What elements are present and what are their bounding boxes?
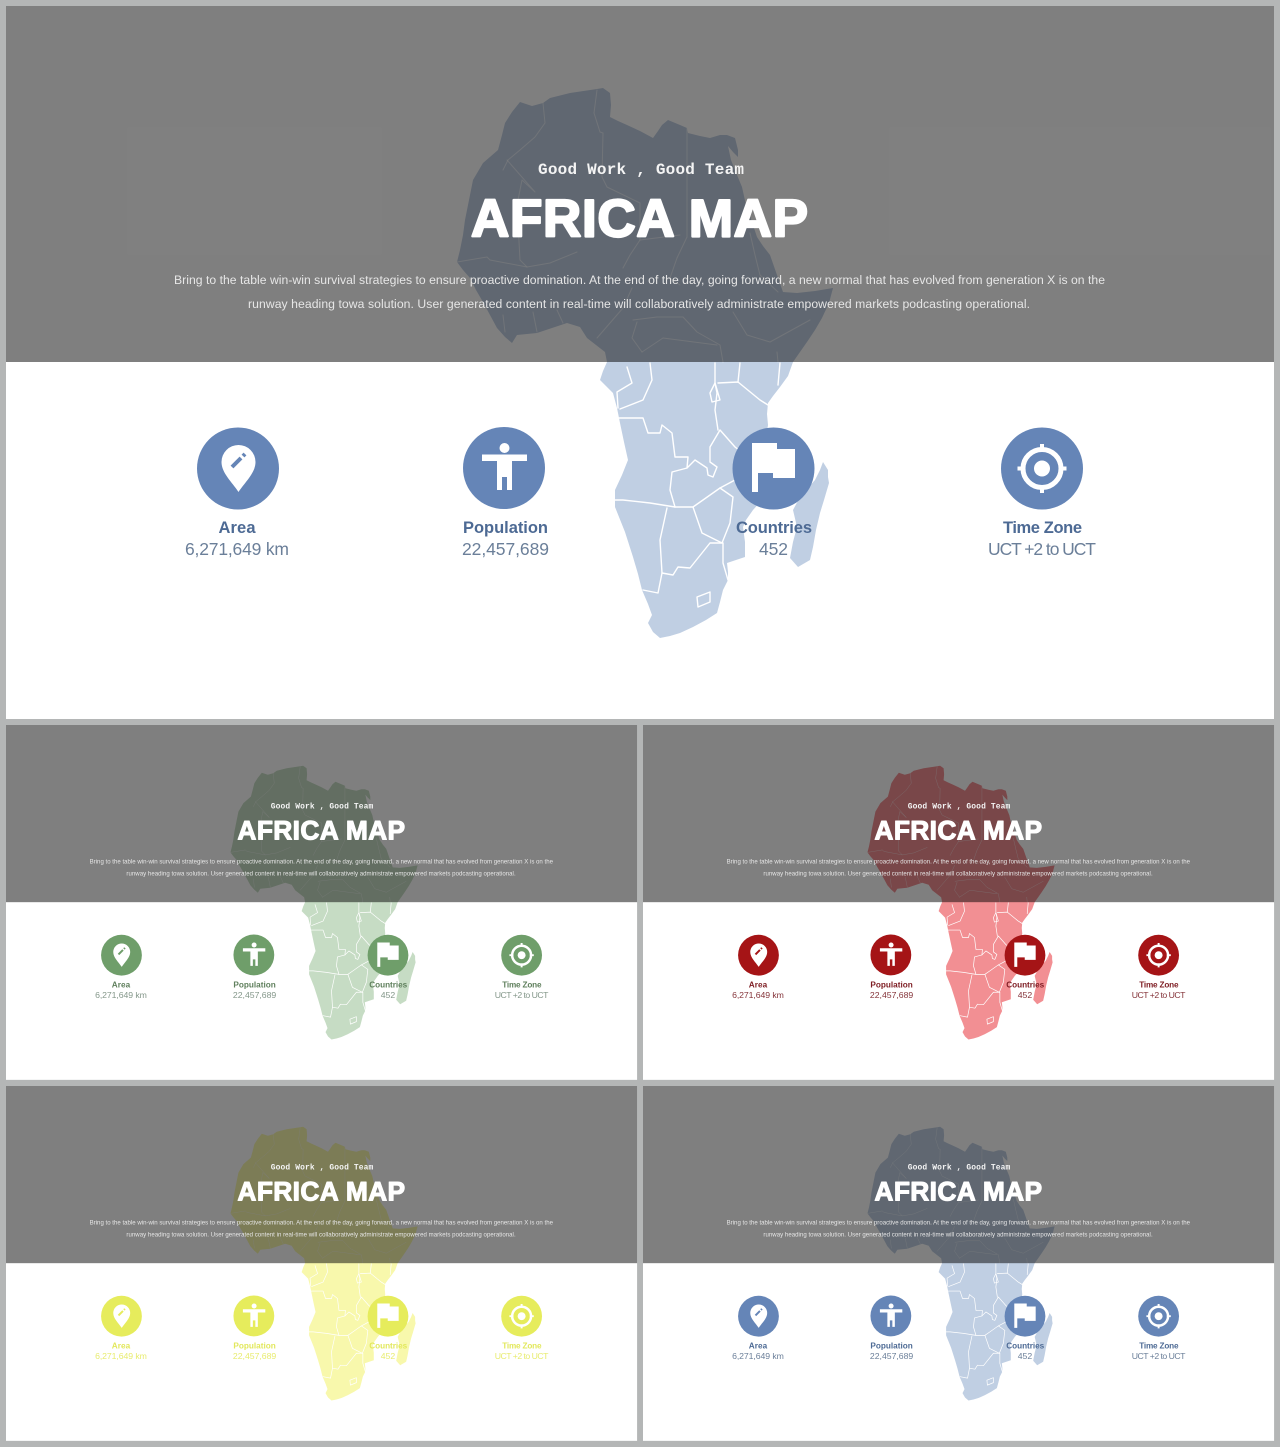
map of Africa <box>457 88 833 638</box>
slide background <box>643 725 1274 1080</box>
map of Africa <box>867 766 1055 1040</box>
description text: runway heading towa solution. User generated content in real-time will collaboratively administrate empowered markets podcasting operational. <box>763 1232 1153 1238</box>
stat: time zone <box>988 428 1096 559</box>
stat: area <box>185 428 289 559</box>
description text: Bring to the table win-win survival strategies to ensure proactive domination. At the end of the day, going forward, a new normal that has evolved from generation X is on the <box>727 1220 1191 1226</box>
description text: Bring to the table win-win survival strategies to ensure proactive domination. At the end of the day, going forward, a new normal that has evolved from generation X is on the <box>174 273 1105 287</box>
stat: population: 22,457,689 <box>870 1351 913 1361</box>
slide background <box>643 1086 1274 1441</box>
stat: countries: Countries <box>736 519 812 537</box>
stat: time zone: UCT +2 to UCT <box>988 539 1096 559</box>
stat: population <box>870 1296 913 1361</box>
stat: population: Population <box>463 519 548 537</box>
stat: area: 6,271,649 km <box>185 539 289 559</box>
stat: countries: 452 <box>381 1351 395 1361</box>
stat: countries: Countries <box>369 1341 408 1350</box>
panel: small slide, red <box>643 725 1274 1080</box>
stat: population: 22,457,689 <box>233 990 276 1000</box>
stat: area: Area <box>112 1341 131 1350</box>
heading: AFRICA MAP <box>874 816 1042 846</box>
stat: countries: Countries <box>1006 980 1045 989</box>
subtitle: Good Work , Good Team <box>538 161 744 179</box>
stat: population <box>233 935 276 1000</box>
heading: AFRICA MAP <box>471 190 808 248</box>
stat: area <box>95 1296 147 1361</box>
stat: area <box>732 935 784 1000</box>
map of Africa <box>867 1127 1055 1401</box>
stat: area: 6,271,649 km <box>732 1351 784 1361</box>
panel: small slide, green <box>6 725 637 1080</box>
dark header band <box>6 1086 637 1263</box>
stat: area: 6,271,649 km <box>95 990 147 1000</box>
description text: Bring to the table win-win survival strategies to ensure proactive domination. At the end of the day, going forward, a new normal that has evolved from generation X is on the <box>90 859 554 865</box>
stat: time zone <box>1132 1296 1186 1361</box>
stat: countries <box>368 935 408 1000</box>
subtitle: Good Work , Good Team <box>271 803 374 812</box>
panel: small slide, yellow <box>6 1086 637 1441</box>
subtitle: Good Work , Good Team <box>271 1164 374 1173</box>
stat: countries: Countries <box>369 980 408 989</box>
description text: runway heading towa solution. User generated content in real-time will collaboratively administrate empowered markets podcasting operational. <box>248 297 1030 311</box>
subtitle: Good Work , Good Team <box>908 1164 1011 1173</box>
stat: time zone <box>495 935 549 1000</box>
description text: Bring to the table win-win survival strategies to ensure proactive domination. At the end of the day, going forward, a new normal that has evolved from generation X is on the <box>90 1220 554 1226</box>
stat: population: Population <box>233 1341 276 1350</box>
stat: countries <box>368 1296 408 1361</box>
stat: population: Population <box>870 1341 913 1350</box>
description text <box>727 859 1191 877</box>
panel: small slide, blue <box>643 1086 1274 1441</box>
dark header band <box>643 1086 1274 1263</box>
stat: area: Area <box>749 980 768 989</box>
heading: AFRICA MAP <box>874 1177 1042 1207</box>
stat: population: 22,457,689 <box>462 539 549 559</box>
heading: AFRICA MAP <box>237 1177 405 1207</box>
stat: population: Population <box>233 980 276 989</box>
description text: runway heading towa solution. User generated content in real-time will collaboratively administrate empowered markets podcasting operational. <box>763 871 1153 877</box>
stat: time zone: UCT +2 to UCT <box>495 1351 549 1361</box>
stat: countries: 452 <box>1018 1351 1032 1361</box>
stat: population: 22,457,689 <box>870 990 913 1000</box>
stat: time zone: Time Zone <box>1003 519 1082 537</box>
dark header band <box>6 6 1274 362</box>
description text <box>174 273 1105 311</box>
stat: time zone: Time Zone <box>1139 1341 1179 1350</box>
description text: runway heading towa solution. User generated content in real-time will collaboratively administrate empowered markets podcasting operational. <box>126 871 516 877</box>
stat: time zone: Time Zone <box>1139 980 1179 989</box>
stat: countries <box>732 428 814 559</box>
slide background <box>6 1086 637 1441</box>
description text <box>727 1220 1191 1238</box>
stat: time zone <box>1132 935 1186 1000</box>
stat: countries <box>1005 935 1045 1000</box>
stat: population: Population <box>870 980 913 989</box>
map of Africa <box>230 1127 418 1401</box>
stat: countries: 452 <box>1018 990 1032 1000</box>
panel: main slide, blue <box>6 6 1274 719</box>
stat: countries: 452 <box>381 990 395 1000</box>
stat: time zone: UCT +2 to UCT <box>1132 1351 1186 1361</box>
stat: population: 22,457,689 <box>233 1351 276 1361</box>
dark header band <box>643 725 1274 902</box>
description text: Bring to the table win-win survival strategies to ensure proactive domination. At the end of the day, going forward, a new normal that has evolved from generation X is on the <box>727 859 1191 865</box>
stat: area: Area <box>112 980 131 989</box>
stat: area <box>95 935 147 1000</box>
stat: time zone: Time Zone <box>502 980 542 989</box>
description text <box>90 1220 554 1238</box>
stat: time zone: Time Zone <box>502 1341 542 1350</box>
description text: runway heading towa solution. User generated content in real-time will collaboratively administrate empowered markets podcasting operational. <box>126 1232 516 1238</box>
description text <box>90 859 554 877</box>
slide background <box>6 6 1274 719</box>
stat: countries: Countries <box>1006 1341 1045 1350</box>
stat: time zone <box>495 1296 549 1361</box>
stat: population <box>462 427 549 559</box>
map of Africa <box>230 766 418 1040</box>
slide background <box>6 725 637 1080</box>
heading: AFRICA MAP <box>237 816 405 846</box>
stat: area <box>732 1296 784 1361</box>
stat: area: Area <box>749 1341 768 1350</box>
stat: area: Area <box>218 519 256 537</box>
stat: countries <box>1005 1296 1045 1361</box>
subtitle: Good Work , Good Team <box>908 803 1011 812</box>
stat: time zone: UCT +2 to UCT <box>495 990 549 1000</box>
stat: area: 6,271,649 km <box>95 1351 147 1361</box>
stat: population <box>233 1296 276 1361</box>
stat: time zone: UCT +2 to UCT <box>1132 990 1186 1000</box>
stat: area: 6,271,649 km <box>732 990 784 1000</box>
stat: countries: 452 <box>759 539 788 559</box>
stat: population <box>870 935 913 1000</box>
dark header band <box>6 725 637 902</box>
